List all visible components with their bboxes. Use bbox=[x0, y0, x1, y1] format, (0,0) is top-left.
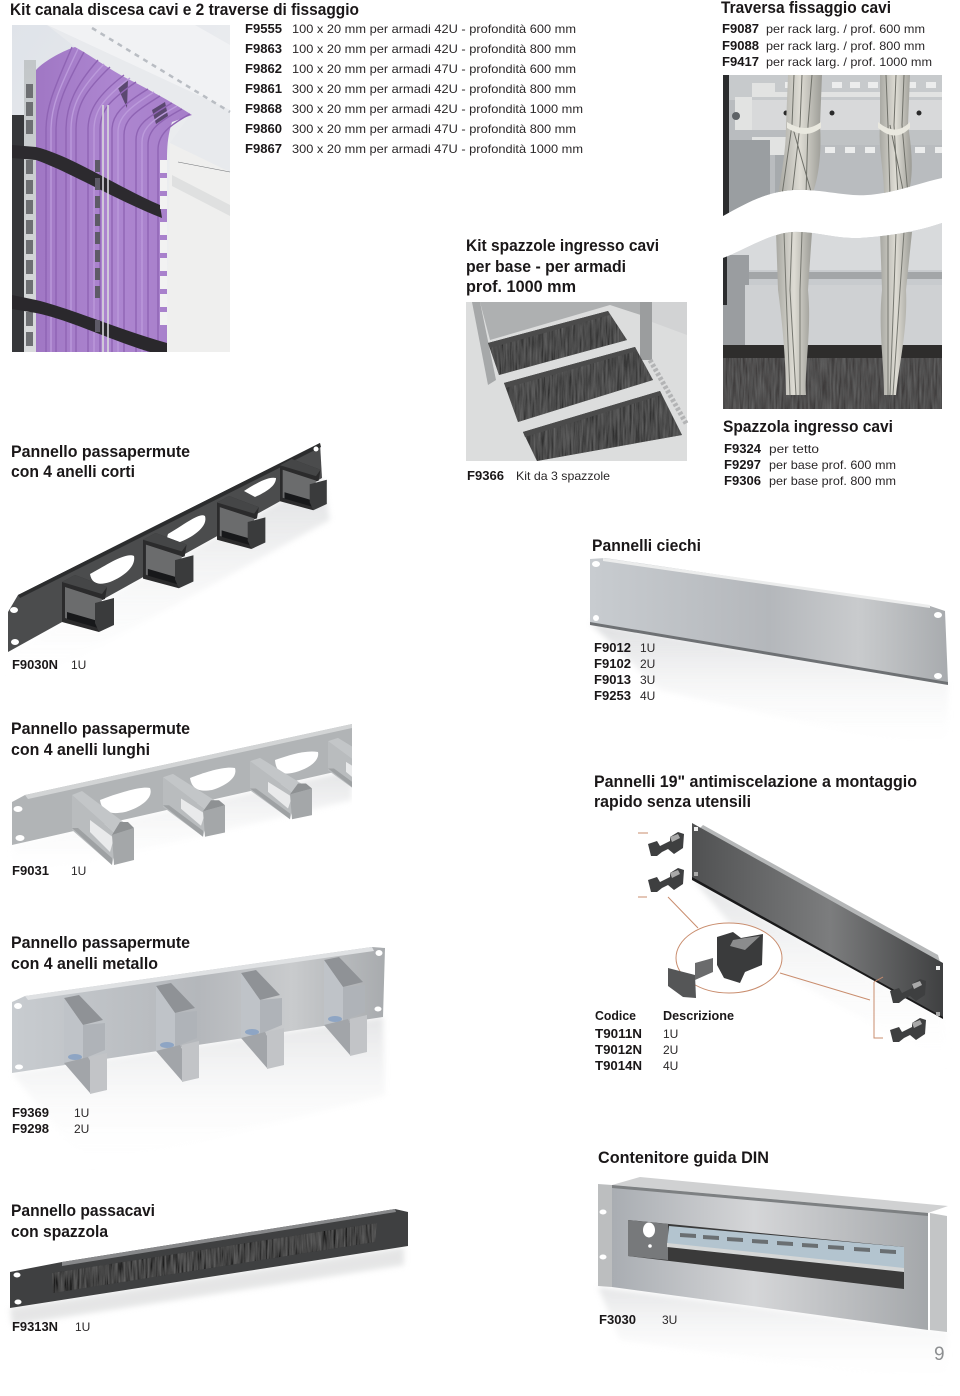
table: anti-mixing codes: T9012N bbox=[595, 1043, 642, 1057]
label: F9369 F9298: F9369 bbox=[12, 1106, 49, 1120]
heading: anelli corti: con 4 anelli corti bbox=[11, 463, 135, 481]
heading: passacavi bbox=[11, 1202, 155, 1241]
label: F9030N bbox=[12, 658, 86, 672]
table: canala codes: F9860 bbox=[245, 122, 282, 136]
heading: anelli lunghi: Pannello passapermute bbox=[11, 720, 190, 738]
page number: 9 bbox=[934, 1344, 945, 1365]
table: spazzola codes: F9306 bbox=[724, 474, 761, 488]
table: spazzola codes: F9297 bbox=[724, 458, 761, 472]
table: canala codes: 300 x 20 mm per armadi 42U - profondità 1000 mm bbox=[292, 102, 583, 116]
heading: spazzola ingresso cavi: Spazzola ingresso cavi bbox=[723, 418, 893, 436]
table: canala codes: 100 x 20 mm per armadi 42U - profondità 600 mm bbox=[292, 22, 576, 36]
table: anti-mixing codes: 1U bbox=[663, 1027, 678, 1041]
product: brush panel bbox=[10, 1209, 408, 1325]
table: canala codes: F9867 bbox=[245, 142, 282, 156]
table: traversa codes: per rack larg. / prof. 600 mm bbox=[766, 22, 925, 36]
product: grey panel with long rings bbox=[12, 724, 352, 865]
label: F9030N: F9030N bbox=[12, 658, 58, 672]
heading: anelli metallo bbox=[11, 934, 190, 973]
label: blank panel codes: 1U bbox=[640, 641, 655, 655]
table: anti-mixing codes: 2U bbox=[663, 1043, 678, 1057]
table: anti-mixing codes: 4U bbox=[663, 1059, 678, 1073]
heading: anelli corti bbox=[11, 443, 190, 481]
label: F9369 F9298: F9298 bbox=[12, 1122, 49, 1136]
table: canala codes: 300 x 20 mm per armadi 47U - profondità 800 mm bbox=[292, 122, 576, 136]
table: traversa codes: F9087 bbox=[722, 22, 759, 36]
table: canala codes: 100 x 20 mm per armadi 47U - profondità 600 mm bbox=[292, 62, 576, 76]
table: spazzola codes: per base prof. 600 mm bbox=[769, 458, 896, 472]
table: traversa codes: F9088 bbox=[722, 39, 759, 53]
product: metal ring panel bbox=[12, 947, 385, 1170]
heading: anelli metallo: con 4 anelli metallo bbox=[11, 955, 158, 973]
table: anti-mixing codes: Descrizione bbox=[663, 1009, 734, 1023]
table: canala codes: 100 x 20 mm per armadi 42U - profondità 800 mm bbox=[292, 42, 576, 56]
label: F9369 F9298: 2U bbox=[74, 1122, 89, 1136]
table: spazzola codes: per base prof. 800 mm bbox=[769, 474, 896, 488]
label: blank panel codes: 3U bbox=[640, 673, 655, 687]
heading: anelli lunghi bbox=[11, 720, 190, 759]
heading: contenitore guida DIN: Contenitore guida DIN bbox=[598, 1149, 769, 1167]
heading: pannelli ciechi: Pannelli ciechi bbox=[592, 537, 701, 555]
table: canala codes: F9868 bbox=[245, 102, 282, 116]
product: blank panel bbox=[590, 558, 948, 755]
table: spazzola codes bbox=[724, 442, 896, 488]
heading: pannelli antimiscelazione bbox=[594, 773, 917, 811]
table: traversa codes: per rack larg. / prof. 1000 mm bbox=[766, 55, 932, 69]
label: F3030 bbox=[599, 1313, 677, 1327]
photo: purple cables in rack bbox=[12, 25, 230, 352]
label: F9369 F9298 bbox=[12, 1106, 89, 1136]
label: F9031 bbox=[12, 864, 86, 878]
label: blank panel codes: F9012 bbox=[594, 641, 631, 655]
table: canala codes: 300 x 20 mm per armadi 47U - profondità 1000 mm bbox=[292, 142, 583, 156]
label: F9031: 1U bbox=[71, 864, 86, 878]
heading: kit spazzole bbox=[466, 237, 659, 296]
callout lines bbox=[638, 833, 883, 1038]
label: F9366: Kit da 3 spazzole bbox=[516, 469, 610, 483]
table: anti-mixing codes: Codice bbox=[595, 1009, 636, 1023]
label: F9031: F9031 bbox=[12, 864, 49, 878]
table: anti-mixing codes: T9014N bbox=[595, 1059, 642, 1073]
heading: anelli metallo: Pannello passapermute bbox=[11, 934, 190, 952]
table: canala codes: F9862 bbox=[245, 62, 282, 76]
photo: cable cross-bar bbox=[723, 75, 945, 220]
heading: kit canala: Kit canala discesa cavi e 2 traverse di fissaggio bbox=[10, 1, 359, 19]
table: anti-mixing codes bbox=[595, 1009, 734, 1073]
table: canala codes: F9863 bbox=[245, 42, 282, 56]
table: canala codes bbox=[245, 22, 583, 156]
heading: passacavi: Pannello passacavi bbox=[11, 1202, 155, 1220]
label: F3030: 3U bbox=[662, 1313, 677, 1327]
table: spazzola codes: F9324 bbox=[724, 442, 761, 456]
heading: kit spazzole: Kit spazzole ingresso cavi bbox=[466, 237, 659, 255]
label: F9030N: 1U bbox=[71, 658, 86, 672]
callout circle bbox=[676, 923, 782, 993]
heading: anelli lunghi: con 4 anelli lunghi bbox=[11, 741, 150, 759]
label: blank panel codes: F9102 bbox=[594, 657, 631, 671]
heading: kit spazzole: per base - per armadi bbox=[466, 258, 626, 276]
label: F9313N: 1U bbox=[75, 1320, 90, 1334]
icon: clip enlarged bbox=[668, 932, 763, 998]
heading: anelli corti: Pannello passapermute bbox=[11, 443, 190, 461]
heading: pannelli antimiscelazione: rapido senza utensili bbox=[594, 793, 751, 811]
photo: three brushes bbox=[466, 302, 687, 461]
product: DIN rail enclosure bbox=[598, 1177, 948, 1385]
product: black panel with short rings bbox=[8, 443, 330, 695]
table: canala codes: 300 x 20 mm per armadi 42U - profondità 800 mm bbox=[292, 82, 576, 96]
label: blank panel codes: F9013 bbox=[594, 673, 631, 687]
product: anti-mixing panel bbox=[638, 823, 950, 1070]
label: F9313N bbox=[12, 1320, 90, 1334]
table: spazzola codes: per tetto bbox=[769, 442, 819, 456]
table: traversa codes: F9417 bbox=[722, 55, 759, 69]
label: F9366: F9366 bbox=[467, 469, 504, 483]
table: canala codes: F9861 bbox=[245, 82, 282, 96]
label: blank panel codes: 4U bbox=[640, 689, 655, 703]
icon: clips bbox=[648, 832, 926, 1042]
label: F9313N: F9313N bbox=[12, 1320, 58, 1334]
label: F9369 F9298: 1U bbox=[74, 1106, 89, 1120]
label: blank panel codes: 2U bbox=[640, 657, 655, 671]
heading: pannelli antimiscelazione: Pannelli 19" antimiscelazione a montaggio bbox=[594, 773, 917, 791]
label: blank panel codes: F9253 bbox=[594, 689, 631, 703]
heading: passacavi: con spazzola bbox=[11, 1223, 109, 1241]
table: canala codes: F9555 bbox=[245, 22, 282, 36]
label: F3030: F3030 bbox=[599, 1313, 636, 1327]
table: traversa codes bbox=[722, 22, 932, 69]
table: traversa codes: per rack larg. / prof. 800 mm bbox=[766, 39, 925, 53]
label: F9366 bbox=[467, 469, 610, 483]
heading: kit spazzole: prof. 1000 mm bbox=[466, 278, 576, 296]
table: anti-mixing codes: T9011N bbox=[595, 1027, 642, 1041]
label: blank panel codes bbox=[594, 641, 655, 703]
photo: cables through brush bbox=[723, 223, 942, 409]
